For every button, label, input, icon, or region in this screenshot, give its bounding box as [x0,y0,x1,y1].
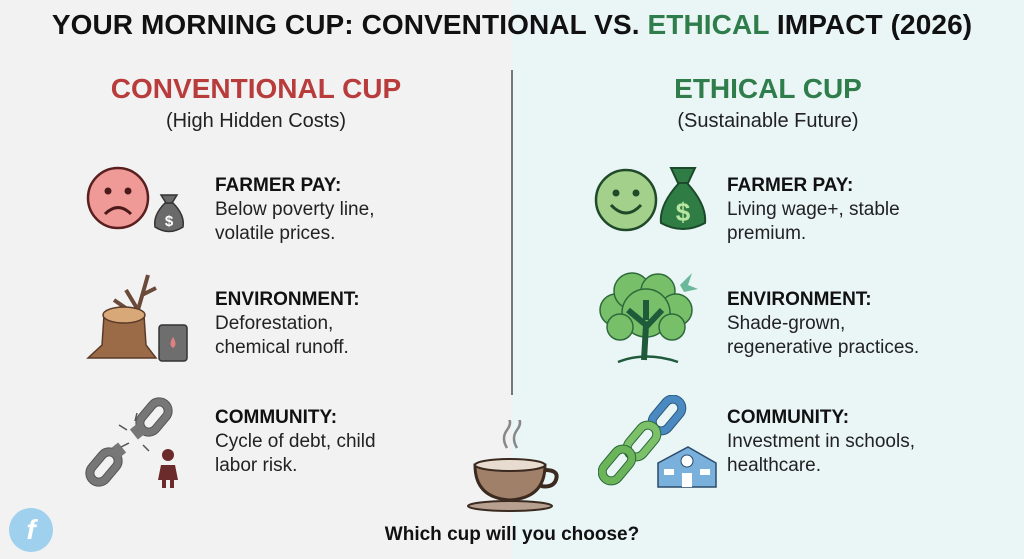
text: ethical community [727,407,915,476]
logo [9,508,53,552]
text: ethical environment: regenerative practices. [727,337,919,358]
icon: sad face with money bag: $ [165,213,174,230]
text: ethical community: healthcare. [727,455,821,476]
icon: coffee cup [467,420,559,512]
icon: chain and school [598,395,717,488]
icon: sad face with money bag [86,166,184,232]
text: conventional community [215,407,376,476]
icon: happy face with money bag [594,167,706,232]
text: ethical environment: ENVIRONMENT: [727,289,872,310]
text: conventional farmer pay: FARMER PAY: [215,175,341,196]
text: conventional farmer pay: Below poverty line, [215,199,374,220]
text: conventional community: labor risk. [215,455,297,476]
icon: tree with bird [599,272,698,364]
heading: ethical: ETHICAL CUP [674,73,862,104]
subheading: conventional: (High Hidden Costs) [166,110,346,132]
text: ethical environment [727,289,919,358]
text: ethical environment: Shade-grown, [727,313,845,334]
text: conventional farmer pay [215,175,374,244]
icon: stump and barrel [86,274,188,362]
text: conventional farmer pay: volatile prices. [215,223,335,244]
text: conventional environment [215,289,360,358]
text: ethical farmer pay: premium. [727,223,806,244]
text: ethical farmer pay: FARMER PAY: [727,175,853,196]
text: ethical community: Investment in schools, [727,431,915,452]
text: ethical community: COMMUNITY: [727,407,849,428]
text: conventional community: Cycle of debt, child [215,431,376,452]
logo: f [26,514,36,545]
divider [511,70,513,395]
text: conventional environment: chemical runoff. [215,337,349,358]
text: conventional environment: Deforestation, [215,313,333,334]
heading: conventional: CONVENTIONAL CUP [111,73,401,104]
text: ethical farmer pay [727,175,900,244]
text: conventional environment: ENVIRONMENT: [215,289,360,310]
text: ethical farmer pay: Living wage+, stable [727,199,900,220]
title: YOUR MORNING CUP: CONVENTIONAL VS. ETHICAL IMPACT (2026) [52,9,972,40]
text: question: Which cup will you choose? [385,524,639,545]
icon: broken chain and child [85,397,178,488]
text: conventional community: COMMUNITY: [215,407,337,428]
icon: happy face with money bag: $ [676,197,691,227]
subheading: ethical: (Sustainable Future) [677,110,859,132]
